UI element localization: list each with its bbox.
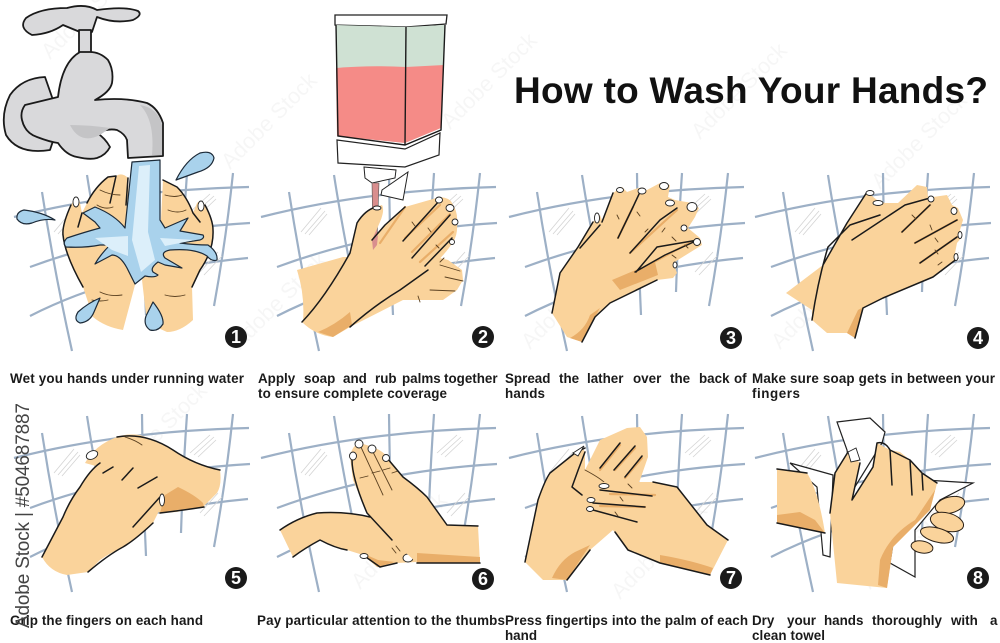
left forearm [777, 469, 825, 533]
caption 2: to ensure complete coverage [258, 386, 447, 401]
number badge 2: 2 [478, 327, 488, 347]
watermark: Adobe Stock [226, 247, 332, 354]
caption 4: Make sure soap gets in between your [752, 371, 996, 386]
upright hand [350, 440, 480, 563]
watermark: Adobe Stock [686, 37, 792, 144]
title: How to Wash Your Hands? [514, 70, 988, 111]
watermark: Adobe Stock [216, 67, 322, 174]
watermark: Adobe Stock [606, 497, 712, 604]
caption 8: Dry [752, 613, 775, 628]
number badge 6 [472, 568, 494, 590]
caption 4: fingers [752, 386, 800, 401]
number badge 3: 3 [726, 328, 736, 348]
caption 7: Press fingertips into the palm of each [505, 613, 748, 628]
horizontal hand [280, 512, 416, 567]
side watermark text: Adobe Stock | #504687887 [13, 403, 34, 628]
number badge 4 [967, 327, 989, 349]
fist [830, 443, 937, 588]
number badge 1 [225, 326, 247, 348]
caption 2: soap [304, 371, 335, 386]
caption 3: Spread [505, 371, 550, 386]
pressing hand [586, 482, 728, 575]
panel: step 2 soap dispenser [261, 15, 497, 351]
icon: water drops [17, 152, 214, 330]
watermark: Adobe Stock [436, 27, 542, 134]
caption 8: your [787, 613, 817, 628]
caption 7 [505, 613, 748, 643]
number badge 7 [720, 567, 742, 589]
caption 8: hands [824, 613, 863, 628]
front gripping hand [42, 454, 165, 575]
caption 2 [258, 371, 498, 401]
caption 6: Pay particular attention to the thumbs [257, 613, 505, 628]
number badge 5: 5 [231, 568, 241, 588]
caption 3: the [670, 371, 690, 386]
number badge 6: 6 [478, 569, 488, 589]
number badge 4: 4 [973, 328, 983, 348]
watermark: Adobe Stock [766, 247, 872, 354]
caption 5: Grip the fingers on each hand [10, 613, 203, 628]
watermark: Adobe Stock [346, 487, 452, 594]
left cupped hand [63, 174, 135, 330]
caption 3: over [633, 371, 662, 386]
caption 1: Wet you hands under running water [10, 371, 245, 386]
right cupped hand [142, 180, 213, 332]
caption 2: and [343, 371, 367, 386]
caption 8: thoroughly [872, 613, 942, 628]
panel: step 6 thumbs [261, 414, 497, 592]
panel: step 3 back of hands [509, 173, 745, 351]
number badge 2 [472, 326, 494, 348]
caption 3: lather [587, 371, 624, 386]
hands with lather [552, 182, 702, 342]
panel: step 5 grip fingers [14, 414, 250, 592]
open palm hand [525, 427, 648, 580]
towel [790, 418, 973, 577]
front hand [302, 197, 458, 337]
back hand [297, 257, 463, 327]
caption 3: back [699, 371, 730, 386]
caption 3: hands [505, 386, 545, 401]
caption 2: palms [402, 371, 441, 386]
caption 2: Apply [258, 371, 296, 386]
caption 8 [752, 613, 998, 643]
watermark: Adobe Stock [516, 247, 622, 354]
number badge 8: 8 [973, 568, 983, 588]
number badge 1: 1 [231, 327, 241, 347]
panel: step 4 between fingers [755, 173, 991, 351]
back hand fingers [910, 493, 967, 555]
caption 2: together [444, 371, 498, 386]
hands interlaced [786, 185, 963, 338]
icon: tap [4, 6, 163, 159]
caption 8: a [990, 613, 998, 628]
panel: step 8 dry with towel [755, 414, 991, 592]
number badge 8 [967, 567, 989, 589]
panel: step 1 wet hands [4, 6, 250, 351]
caption 8: with [950, 613, 978, 628]
caption 2: rub [375, 371, 397, 386]
number badge 7: 7 [726, 568, 736, 588]
icon: water stream and splash [64, 160, 217, 284]
watermark: Adobe Stock [856, 487, 962, 594]
caption 3 [505, 371, 747, 401]
caption 3: the [559, 371, 579, 386]
watermark: Adobe Stock [106, 377, 212, 484]
number badge 5 [225, 567, 247, 589]
watermark: Adobe Stock [866, 87, 972, 194]
gripped back hand [85, 434, 221, 513]
icon: soap dispenser [335, 15, 447, 240]
panel: step 7 fingertips in palm [509, 414, 745, 592]
caption 3: of [734, 371, 747, 386]
caption 8: clean towel [752, 628, 825, 643]
caption 4 [752, 371, 996, 401]
caption 7: hand [505, 628, 537, 643]
number badge 3 [720, 327, 742, 349]
